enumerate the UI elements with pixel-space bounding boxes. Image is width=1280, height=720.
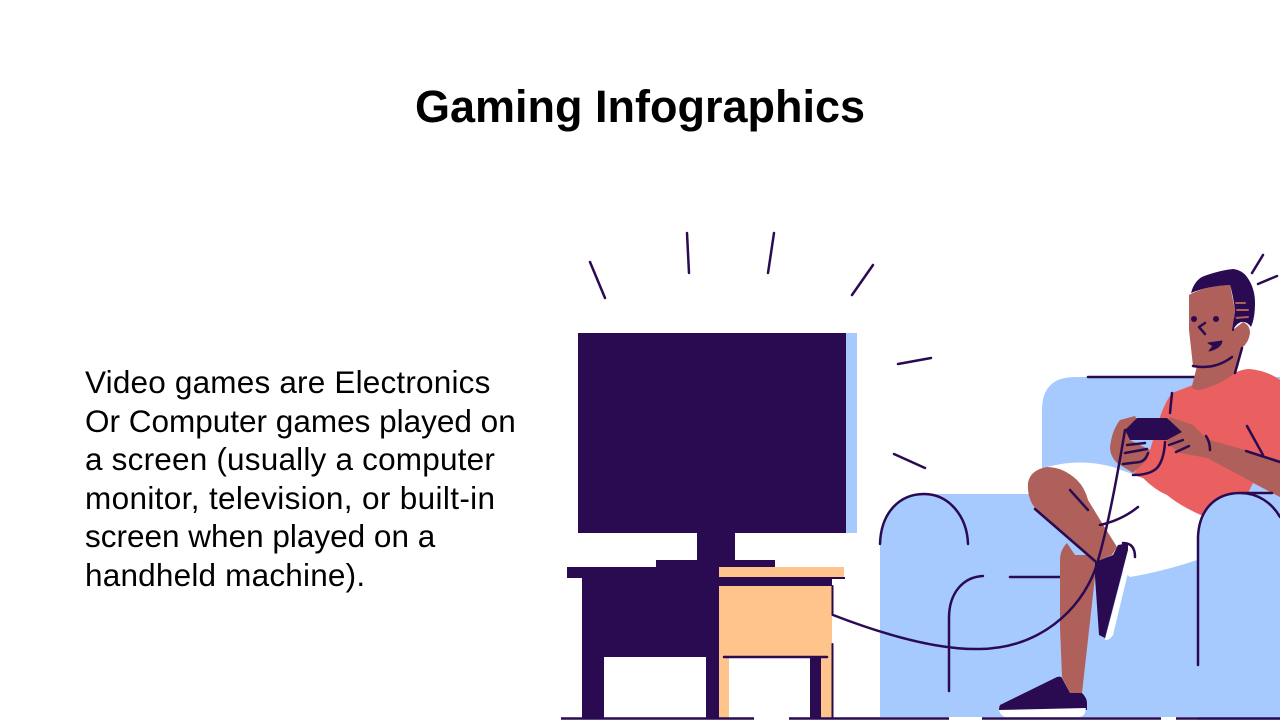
sofa xyxy=(880,377,1280,717)
text block: description: a screen (usually a computer xyxy=(85,441,495,477)
text block: description xyxy=(85,364,516,592)
arm and hands xyxy=(1110,416,1280,497)
right sofa arm xyxy=(1198,493,1280,720)
text block: description: Video games are Electronics xyxy=(85,364,491,400)
title: Gaming Infographics xyxy=(415,81,865,132)
text block: description: screen when played on a xyxy=(85,518,435,554)
text block: description: handheld machine). xyxy=(85,556,365,592)
text block: description: monitor, television, or built-in xyxy=(85,480,495,516)
controller cable xyxy=(833,430,1125,649)
TV table xyxy=(567,567,845,718)
shorts xyxy=(1047,462,1203,577)
legs and shoes xyxy=(999,467,1138,717)
controller xyxy=(1125,418,1182,440)
face details xyxy=(1191,255,1277,373)
shirt xyxy=(1133,369,1280,516)
icon: TV glow rays xyxy=(590,233,931,468)
floor line xyxy=(561,717,1280,720)
arm and hand details xyxy=(1123,393,1280,475)
text block: description: Or Computer games played on xyxy=(85,402,516,438)
neck and face skin xyxy=(1189,285,1250,390)
TV xyxy=(578,333,857,567)
hair xyxy=(1191,269,1255,330)
